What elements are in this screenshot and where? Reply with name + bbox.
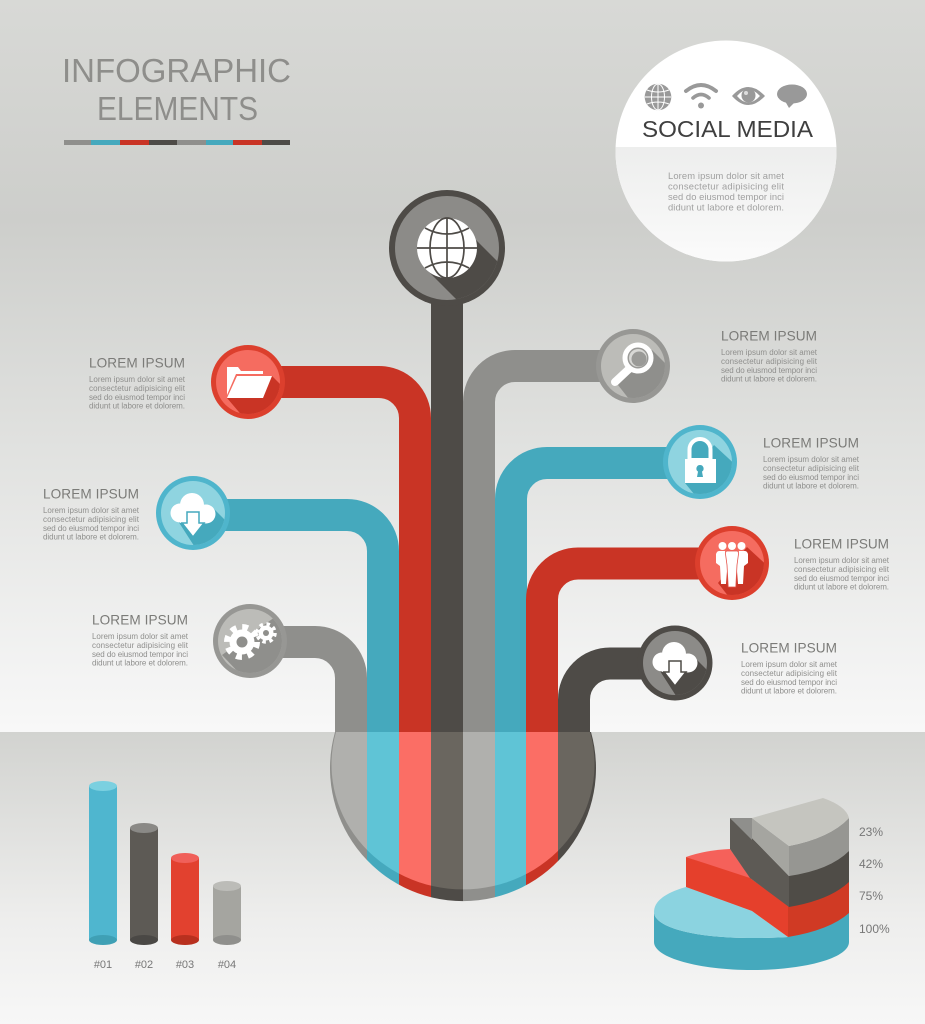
text block: people (794, 536, 890, 592)
text block: gears: didunt ut labore et dolorem. (92, 658, 188, 668)
text block: dark cloud: didunt ut labore et dolorem. (741, 686, 837, 696)
bowl base (325, 732, 600, 907)
social media text: sed do eiusmod tempor inci (668, 191, 784, 202)
title: INFOGRAPHIC (62, 52, 291, 89)
text block: gears (92, 612, 189, 668)
text block: gears: Lorem ipsum dolor sit amet (92, 632, 189, 641)
icon: social globe (645, 84, 671, 110)
text block: padlock: Lorem ipsum dolor sit amet (763, 455, 860, 464)
slice: 23% grey (730, 798, 849, 876)
panel: social media circle (616, 40, 836, 262)
title: ELEMENTS (97, 90, 258, 127)
text block: padlock: consectetur adipisicing elit (763, 464, 860, 473)
pie labels (859, 825, 890, 936)
icon node: cloud download teal (156, 476, 230, 550)
icon node: padlock (663, 425, 737, 499)
title (62, 52, 291, 127)
icon node: people (695, 526, 769, 600)
text block: teal cloud: sed do eiusmod tempor inci (43, 524, 139, 533)
social media text: Lorem ipsum dolor sit amet (668, 170, 784, 181)
icon node: magnifier (600, 329, 670, 403)
text block: dark cloud: LOREM IPSUM (741, 640, 837, 656)
title colour rule (64, 140, 290, 145)
text block: folder: LOREM IPSUM (89, 356, 185, 370)
bar chart: cylinders (89, 781, 241, 971)
text block: magnifier: didunt ut labore et dolorem. (721, 374, 817, 384)
icon node: gears (213, 604, 284, 678)
icon node: globe (389, 190, 505, 304)
pie labels: 75% (859, 889, 883, 903)
text block: magnifier: LOREM IPSUM (721, 328, 817, 344)
text block: gears: sed do eiusmod tempor inci (92, 650, 188, 659)
bar #04: #04 (218, 959, 236, 971)
background wall (0, 0, 925, 732)
icon node: folder (211, 345, 285, 419)
text block: dark cloud: consectetur adipisicing elit (741, 669, 838, 678)
pie labels: 23% (859, 825, 883, 839)
text block: teal cloud: Lorem ipsum dolor sit amet (43, 506, 140, 515)
icon: wifi (686, 85, 716, 108)
text block: teal cloud: LOREM IPSUM (43, 486, 139, 502)
bar #02: #02 (135, 959, 153, 971)
bar #01: #01 (94, 959, 112, 971)
text block: dark cloud: Lorem ipsum dolor sit amet (741, 660, 838, 669)
text block: magnifier: Lorem ipsum dolor sit amet (721, 348, 818, 357)
text block: dark cloud: sed do eiusmod tempor inci (741, 678, 837, 687)
social media heading: SOCIAL MEDIA (642, 116, 814, 142)
bar #04 (213, 881, 241, 971)
text block: teal cloud: consectetur adipisicing elit (43, 515, 140, 524)
text block: magnifier: sed do eiusmod tempor inci (721, 366, 817, 375)
social media text: didunt ut labore et dolorem. (668, 202, 784, 212)
text block: padlock: sed do eiusmod tempor inci (763, 473, 859, 482)
stacked 3d pie chart (654, 798, 890, 970)
bar #02 (130, 823, 158, 971)
text block: padlock: didunt ut labore et dolorem. (763, 482, 859, 490)
social media text: consectetur adipisicing elit (668, 180, 784, 192)
text block: teal cloud (43, 486, 140, 542)
pie labels: 42% (859, 857, 883, 871)
text block: people: consectetur adipisicing elit (794, 565, 890, 574)
bar #03 (171, 853, 199, 971)
text block: people: Lorem ipsum dolor sit amet (794, 556, 890, 565)
pie labels: 100% (859, 922, 890, 936)
icon: eye (732, 87, 765, 105)
connector bands (210, 290, 710, 732)
icon: speech bubble (777, 84, 807, 108)
text block: people: sed do eiusmod tempor inci (794, 574, 889, 583)
slice: 100% teal (654, 887, 849, 970)
text block: gears: consectetur adipisicing elit (92, 641, 189, 650)
social media text (668, 170, 784, 212)
text block: magnifier (721, 328, 818, 384)
text block: people: LOREM IPSUM (794, 536, 889, 552)
bar #03: #03 (176, 959, 194, 971)
text block: magnifier: consectetur adipisicing elit (721, 357, 818, 366)
text block: folder: consectetur adipisicing elit (89, 384, 186, 393)
text block: folder (89, 356, 186, 410)
text block: folder: didunt ut labore et dolorem. (89, 402, 185, 410)
bar #01 (89, 781, 117, 971)
icon node: cloud download dark (640, 626, 712, 700)
text block: padlock (763, 436, 860, 490)
text block: padlock: LOREM IPSUM (763, 436, 859, 450)
slice: 42% dark (730, 818, 849, 907)
text block: dark cloud (741, 640, 838, 696)
text block: teal cloud: didunt ut labore et dolorem. (43, 532, 139, 542)
text block: people: didunt ut labore et dolorem. (794, 582, 889, 592)
text block: gears: LOREM IPSUM (92, 612, 188, 628)
slice: 75% red (686, 849, 849, 937)
background floor (0, 732, 925, 1024)
text block: folder: sed do eiusmod tempor inci (89, 393, 185, 402)
text block: folder: Lorem ipsum dolor sit amet (89, 375, 186, 384)
